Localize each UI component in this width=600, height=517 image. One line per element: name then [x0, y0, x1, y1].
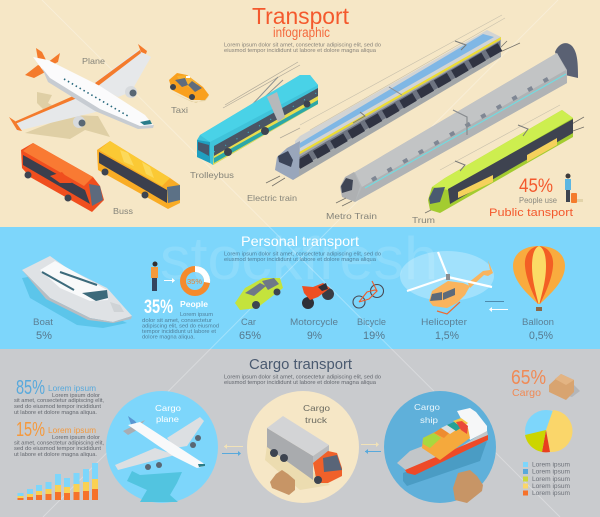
stat: 85 percent: Lorem ipsum	[48, 383, 96, 393]
text block: 15 percent: Lorem ipsum dolor	[52, 435, 100, 441]
icon: red bus	[21, 143, 104, 212]
legend	[523, 462, 570, 497]
text block: cargo intro: Lorem ipsum dolor sit amet, consectetur adipiscing elit, sed do	[224, 374, 381, 380]
icon: bicycle	[353, 281, 384, 308]
legend: Lorem ipsum	[532, 462, 570, 468]
stat: 45 percent public transport: Public tansport	[489, 207, 573, 219]
panel: cargo transport background	[0, 348, 600, 517]
text block: 85 percent: ut labore et dolore magna aliqua.	[14, 410, 97, 416]
text block: people	[142, 312, 219, 340]
title: infographic	[273, 25, 330, 40]
icon: balloon	[513, 246, 565, 311]
text block: people: tempor incididunt ut labore et	[142, 329, 217, 335]
arrow: person to donut	[164, 278, 175, 283]
stat: 15 percent: Lorem ipsum	[48, 425, 96, 435]
text block: 15 percent: sed do eiusmod tempor incididunt	[14, 446, 102, 452]
stat: 45 percent public transport: 45%	[519, 176, 553, 197]
label: trolleybus: Trolleybus	[190, 170, 234, 180]
heading: cargo transport: Cargo transport	[249, 356, 353, 373]
panel: cargo plane circle: plane	[156, 414, 179, 424]
panel: cargo truck circle: truck	[305, 415, 328, 425]
icon: helicopter	[400, 251, 494, 314]
panel: cargo plane circle: Cargo	[155, 403, 181, 413]
panel: public transport background	[0, 0, 600, 227]
chart: 35 percent donut: 35%	[187, 279, 202, 286]
label: boat: Boat	[33, 317, 54, 327]
text block: intro: Lorem ipsum dolor sit amet, consectetur adipiscing elit, sed do	[224, 42, 381, 48]
label: plane: Plane	[82, 56, 105, 66]
icon: tram	[425, 105, 584, 213]
text block: personal intro	[224, 252, 381, 263]
watermark: stockfresh	[160, 225, 438, 292]
stat: 15 percent: 15%	[16, 419, 45, 441]
label: car: 65%	[239, 330, 261, 342]
chart: stacked bars	[18, 463, 98, 500]
label: balloon	[522, 317, 554, 342]
panel: cargo truck circle: Cargo	[303, 403, 330, 413]
arrows: plane and truck	[222, 444, 243, 456]
text block: 15 percent: sit amet, consectetur adipiscing elit,	[14, 440, 105, 446]
text block: cargo intro: eiusmod tempor incididunt ut labore et dolore magna aliqua	[224, 380, 376, 386]
label: motorcycle: Motorcycle	[290, 317, 338, 327]
text block: intro: eiusmod tempor incididunt ut labore et dolore magna aliqua	[224, 48, 376, 54]
stat: 45 percent public transport: People use	[519, 196, 558, 205]
label: boat	[33, 317, 54, 342]
text block: people: Lorem ipsum	[180, 312, 214, 318]
icon: electric train	[266, 15, 520, 186]
stat: 65 percent cargo: Cargo	[512, 387, 541, 399]
panel: cargo plane circle	[106, 391, 218, 503]
panel: cargo ship circle: ship	[420, 415, 438, 425]
label: helicopter: 1,5%	[435, 330, 459, 342]
label: balloon: Balloon	[522, 317, 554, 327]
label: motorcycle	[290, 317, 338, 342]
panel: cargo ship circle	[384, 391, 496, 503]
panel: personal transport background	[0, 227, 600, 348]
icon: yellow bus	[97, 141, 180, 209]
icon: person	[151, 262, 158, 291]
label: boat: 5%	[36, 330, 52, 342]
label: electric train: Electric train	[247, 193, 297, 203]
label: bicycle	[357, 317, 386, 342]
chart: pie	[525, 410, 573, 452]
icon: motorcycle	[302, 283, 334, 309]
label: balloon: 0,5%	[529, 330, 553, 342]
icon: boxes	[549, 374, 580, 400]
stat: 85 percent	[16, 377, 96, 399]
text block: people: adipiscing elit, sed do eiusmod	[142, 324, 219, 330]
text block: 85 percent: sit amet, consectetur adipiscing elit,	[14, 398, 105, 404]
stat: 65 percent cargo: 65%	[511, 367, 546, 389]
stat: 35 percent people: 35%	[144, 297, 173, 318]
legend: Lorem ipsum	[532, 484, 570, 490]
label: car	[239, 317, 261, 342]
legend: Lorem ipsum	[532, 491, 570, 497]
text block: 85 percent	[14, 393, 105, 416]
text block: 15 percent	[14, 435, 105, 458]
text block: people: dolor sit amet, consectetur	[142, 318, 212, 324]
heading: personal transport: Personal transport	[241, 233, 359, 249]
title: Transport	[252, 3, 350, 29]
icon: trolleybus	[197, 62, 318, 165]
stat: 15 percent	[16, 419, 96, 441]
text block: personal intro: eiusmod tempor incididunt ut labore et dolore magna aliqua	[224, 257, 376, 263]
text block: people: dolore magna aliqua.	[142, 334, 195, 340]
panel: cargo truck circle	[247, 391, 359, 503]
text block: 85 percent: sed do eiusmod tempor incididunt	[14, 404, 102, 410]
chart: 35 percent donut	[183, 266, 210, 293]
icon: boat	[22, 256, 132, 328]
label: bus: Buss	[113, 206, 133, 216]
label: motorcycle: 9%	[307, 330, 322, 342]
stat: 45 percent public transport	[489, 176, 573, 219]
panel: cargo ship circle: Cargo	[414, 402, 440, 412]
legend: Lorem ipsum	[532, 470, 570, 476]
icon: metro train	[336, 43, 578, 206]
stat: 85 percent: 85%	[16, 377, 45, 399]
text block: personal intro: Lorem ipsum dolor sit amet, consectetur adipiscing elit, sed do	[224, 252, 381, 258]
text block: 85 percent: Lorem ipsum dolor	[52, 393, 100, 399]
label: helicopter: Helicopter	[421, 317, 467, 327]
icon: plane	[9, 44, 154, 139]
label: bicycle: 19%	[363, 330, 385, 342]
label: car: Car	[241, 317, 256, 327]
label: helicopter	[421, 317, 467, 342]
label: metro train: Metro Train	[326, 211, 377, 221]
stat: 35 percent people	[144, 297, 209, 318]
label: tram: Trum	[412, 215, 435, 225]
arrows: helicopter and balloon	[485, 301, 508, 312]
arrows: truck and ship	[361, 442, 381, 454]
text block: intro	[224, 42, 381, 54]
label: taxi: Taxi	[171, 105, 188, 115]
label: bicycle: Bicycle	[357, 317, 386, 327]
text block: cargo intro	[224, 374, 381, 386]
icon: traveller	[565, 174, 583, 203]
stat: 65 percent cargo	[511, 367, 546, 399]
icon: taxi	[169, 73, 209, 103]
text block: 15 percent: ut labore et dolore magna aliqua.	[14, 452, 97, 458]
icon: car	[235, 278, 283, 310]
stat: 35 percent people: People	[180, 300, 209, 309]
legend: Lorem ipsum	[532, 477, 570, 483]
